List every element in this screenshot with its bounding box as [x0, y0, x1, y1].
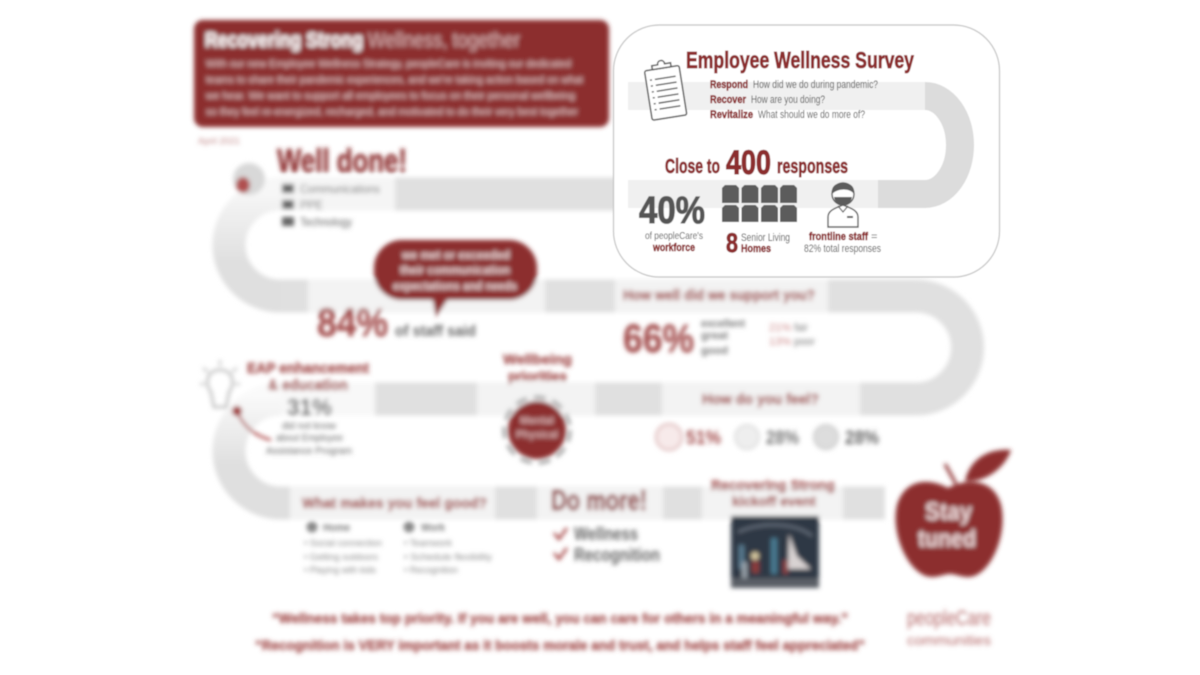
close to 400 responses	[665, 144, 848, 182]
EAP heading: EAP enhancement	[247, 360, 369, 377]
kickoff event heading: Recovering Strong	[711, 477, 835, 493]
kickoff event heading: kickoff event	[732, 493, 816, 509]
survey title: Employee Wellness Survey	[686, 47, 914, 73]
well done list	[282, 182, 380, 229]
stat: 8 senior living homes: Homes	[741, 243, 771, 255]
stat: frontline staff: =	[871, 231, 877, 243]
what makes you feel good: • Schedule flexibility	[404, 552, 492, 563]
stat: 66%: 66%	[623, 317, 694, 361]
stat: 8 senior living homes: Senior Living	[741, 232, 790, 244]
header body text	[205, 58, 583, 118]
well done list: PPE	[300, 198, 323, 212]
stat: 66%: excellent	[701, 318, 745, 330]
survey questions: Revitalize	[710, 109, 753, 121]
kickoff event photo	[731, 516, 819, 588]
header subtitle: Wellness, together	[368, 29, 520, 52]
wellbeing priorities: Mental	[520, 415, 554, 427]
well done heading: Well done!	[277, 142, 407, 179]
stat: 8 senior living homes: 8	[726, 228, 738, 258]
what makes you feel good: What makes you feel good?	[302, 495, 487, 512]
stat: 84% of staff: of staff said	[395, 323, 476, 340]
stat: 66%: great	[701, 330, 728, 342]
kickoff event heading	[711, 477, 835, 509]
icon: clipboard	[643, 58, 687, 120]
what makes you feel good: • Social connection	[304, 538, 382, 549]
icon: well done medal	[233, 163, 265, 195]
serpentine road	[229, 194, 968, 503]
survey questions	[710, 79, 878, 121]
stat: 66%: 13%	[769, 336, 791, 348]
survey questions: Recover	[710, 94, 747, 106]
feelings stats	[656, 424, 879, 450]
stat: 31%: did not know	[282, 421, 337, 432]
stat: 84% of staff: 84%	[317, 301, 388, 345]
speech bubble: we met or exceeded	[401, 250, 510, 262]
survey questions: How did we do during pandemic?	[753, 79, 878, 91]
stat: 40% workforce: workforce	[652, 242, 695, 254]
stat: 40% workforce	[639, 190, 705, 254]
close to 400 responses: Close to	[665, 156, 720, 178]
header title: Recovering Strong	[205, 29, 363, 52]
peopleCare logo: communities	[907, 632, 991, 648]
stat: 84% of staff	[317, 301, 476, 345]
survey road	[628, 96, 960, 194]
stat: frontline staff: 82% total responses	[804, 243, 881, 255]
apple: stay tuned: tuned	[918, 525, 976, 553]
stat: 31%	[266, 394, 352, 457]
stat: 66%: 21%	[769, 322, 791, 334]
feelings stats: 28%	[845, 428, 879, 449]
header body text: teams to share their pandemic experiences, and we're taking action based on what	[206, 74, 583, 86]
well done list: Technology	[300, 215, 352, 229]
feelings stats: 28%	[766, 428, 799, 449]
header body text: so they feel re-energized, recharged, and motivated to do their very best together	[206, 106, 578, 118]
stat: 31%: Assistance Program	[266, 446, 352, 457]
EAP heading: & education	[268, 377, 348, 394]
speech bubble	[374, 240, 537, 317]
icon: masked frontline worker	[828, 183, 858, 227]
wellbeing priorities: Physical	[516, 429, 558, 441]
stat: 31%: about Employee	[276, 433, 343, 444]
close to 400 responses: 400	[726, 144, 771, 182]
close to 400 responses: responses	[777, 156, 848, 178]
speech bubble: their communication	[400, 265, 510, 277]
staff quotes: “Wellness takes top priority. If you are well, you can care for others in a meaningful way.”	[272, 610, 848, 626]
stat: frontline staff: frontline staff	[809, 231, 868, 243]
do more: Recognition	[574, 545, 660, 565]
what makes you feel good: Home	[323, 522, 350, 534]
apple: stay tuned: Stay	[925, 498, 972, 526]
what makes you feel good: • Recognition	[404, 565, 458, 576]
staff quotes	[255, 610, 865, 653]
wellbeing priorities: priorities	[508, 368, 567, 384]
what makes you feel good	[302, 495, 492, 576]
well done list: Communications	[300, 182, 380, 196]
survey questions: What should we do more of?	[758, 109, 865, 121]
staff quotes: “Recognition is VERY important as it boosts morale and trust, and helps staff feel appreciated”	[255, 637, 865, 653]
wellbeing priorities	[503, 351, 572, 463]
stat: 66%: good	[701, 345, 728, 357]
EAP heading	[247, 360, 369, 394]
stat: 8 senior living homes	[726, 228, 790, 258]
stat: 31%: 31%	[287, 394, 332, 420]
what makes you feel good: Work	[421, 522, 446, 534]
header panel	[194, 20, 609, 127]
apple: stay tuned	[896, 450, 1011, 577]
what makes you feel good: • Getting outdoors	[304, 552, 378, 563]
survey questions: Respond	[710, 79, 748, 91]
wellbeing priorities: Wellbeing	[503, 351, 572, 367]
stat: 40% workforce: 40%	[639, 190, 705, 232]
how well heading: How well did we support you?	[623, 287, 815, 304]
what makes you feel good: • Teamwork	[404, 538, 452, 549]
header body text: we hear. We want to support all employees to focus on their personal wellbeing	[205, 90, 575, 102]
stat: frontline staff	[804, 231, 881, 255]
speech bubble: expectations and needs	[393, 281, 517, 293]
header body text: With our new Employee Wellness Strategy, peopleCare is inviting our dedicated	[206, 58, 571, 70]
what makes you feel good: • Playing with kids	[304, 565, 376, 576]
do more	[551, 485, 660, 565]
stat: 66%	[623, 317, 815, 361]
peopleCare logo	[907, 607, 991, 648]
panel: employee wellness survey	[614, 25, 1000, 277]
feelings stats: 51%	[686, 428, 721, 449]
icon: light bulb	[200, 360, 271, 440]
stat: 66%: fair	[794, 322, 808, 334]
do more: Wellness	[574, 524, 638, 544]
stat: 66%: poor	[794, 336, 815, 348]
blurred infographic body	[194, 20, 1011, 653]
do more: Do more!	[551, 485, 647, 517]
stat: 40% workforce: of peopleCare's	[645, 230, 703, 242]
date: April 2021	[198, 136, 240, 146]
how do you feel heading: How do you feel?	[702, 391, 819, 408]
survey questions: How are you doing?	[751, 94, 825, 106]
icon: eight buildings	[722, 185, 797, 222]
peopleCare logo: peopleCare	[907, 607, 991, 630]
